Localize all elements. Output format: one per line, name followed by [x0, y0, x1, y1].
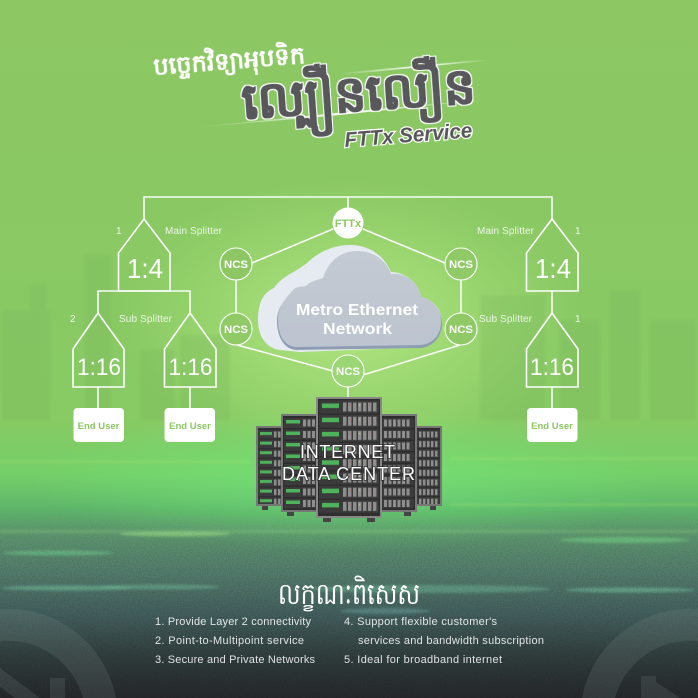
features list: 4. Support flexible customer's [344, 616, 498, 628]
asphalt texture [0, 516, 698, 692]
centre rack [316, 397, 382, 522]
features heading: លក្ខណៈពិសេស [278, 575, 420, 612]
data center label: INTERNET [300, 442, 395, 462]
left sub splitter B 1:16: 1:16 [168, 354, 212, 381]
end user box right: End User [531, 421, 573, 432]
right main splitter 1:4: 1:4 [535, 253, 571, 284]
title: FTTx Service: FTTx Service [344, 119, 473, 152]
NCS node lower left: NCS [224, 324, 248, 336]
splitter labels: Sub Splitter [119, 314, 173, 325]
NCS node lower right: NCS [449, 324, 473, 336]
left sub splitter A 1:16: 1:16 [77, 354, 121, 381]
outer racks [256, 426, 442, 510]
NCS node lower left [220, 313, 252, 345]
NCS node upper left [220, 248, 252, 280]
splitter labels [70, 226, 581, 325]
gear watermark left [0, 609, 116, 698]
features list: services and bandwidth subscription [358, 635, 544, 647]
server racks: internet data center [256, 397, 442, 522]
NCS node upper right [445, 248, 477, 280]
splitter labels: Sub Splitter [479, 314, 533, 325]
features list: 1. Provide Layer 2 connectivity [155, 616, 312, 628]
left sub splitter A 1:16 [73, 313, 124, 387]
data center label [282, 442, 415, 484]
end user box left A: End User [78, 421, 120, 432]
features list: 2. Point-to-Multipoint service [155, 635, 304, 647]
NCS node bottom: NCS [336, 366, 360, 378]
splitter labels: 2 [70, 314, 76, 325]
right sub splitter 1:16 [526, 313, 578, 387]
end user box left B: End User [169, 421, 211, 432]
features list: 3. Secure and Private Networks [155, 654, 316, 666]
NCS node upper right: NCS [449, 259, 473, 271]
cloud: Metro Ethernet Network [258, 245, 442, 352]
splitter labels: Main Splitter [165, 226, 223, 237]
end user box right [527, 408, 578, 442]
left main splitter 1:4: 1:4 [127, 253, 163, 284]
middle racks [281, 414, 417, 516]
title streak upper [340, 59, 490, 75]
NCS node bottom [332, 355, 364, 387]
splitter labels: 1 [116, 226, 122, 237]
road light lines [0, 458, 698, 614]
features list [155, 616, 544, 666]
left sub splitter B 1:16 [164, 313, 216, 387]
NCS node upper left: NCS [224, 259, 248, 271]
end user box left B [164, 408, 215, 442]
title block [152, 39, 490, 152]
FTTx node [332, 208, 364, 238]
title: Khmer large line: ល្បឿនលឿន [240, 53, 478, 142]
end user box left A [74, 408, 124, 442]
network connector lines [98, 197, 552, 408]
gear watermark right [582, 609, 698, 698]
features list: 5. Ideal for broadband internet [344, 654, 502, 666]
splitter labels: Main Splitter [477, 226, 535, 237]
left main splitter 1:4 [118, 219, 170, 291]
data center label: DATA CENTER [282, 464, 415, 484]
splitter labels: 1 [575, 226, 581, 237]
city skyline [2, 255, 696, 420]
NCS node lower right [445, 313, 477, 345]
title streak lower [190, 99, 490, 128]
cloud: Metro Ethernet Network: Metro Ethernet [296, 302, 419, 319]
FTTx node: FTTx [335, 218, 362, 230]
title: Khmer small line: បច្ចេកវិទ្យាអុបទិក [152, 39, 306, 84]
right main splitter 1:4 [526, 219, 578, 291]
cloud: Metro Ethernet Network: Network [323, 321, 392, 338]
right sub splitter 1:16: 1:16 [530, 354, 574, 381]
splitter labels: 1 [575, 314, 581, 325]
